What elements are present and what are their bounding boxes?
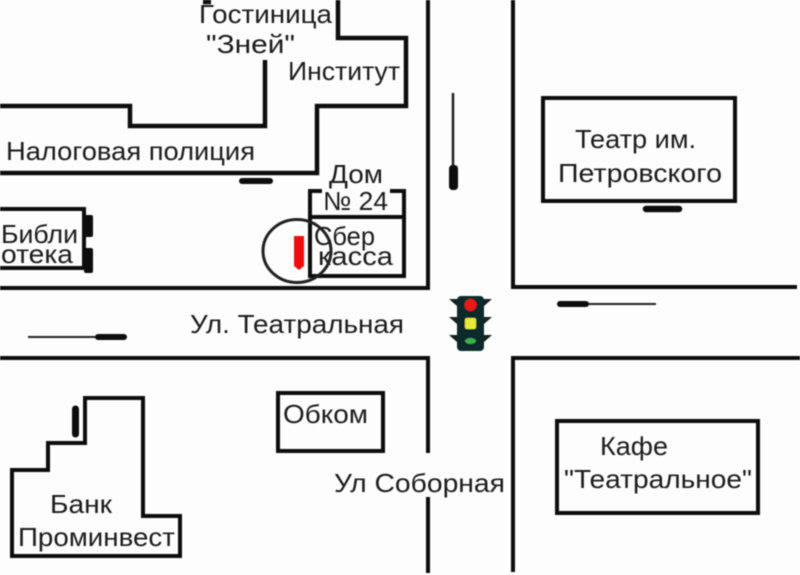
entrance: bank	[72, 409, 79, 434]
label: house number: № 24	[323, 186, 388, 216]
icon: traffic light	[449, 296, 492, 351]
label: house: Дом	[329, 159, 383, 189]
label: hotel name: "Зней"	[206, 29, 295, 59]
label: savings bank line 2: касса	[318, 241, 394, 271]
label: theatre line 1: Театр им.	[575, 124, 696, 154]
label: Sobornaya street: Ул Соборная	[334, 468, 505, 498]
building: cafe	[557, 421, 758, 513]
entrance: theatre	[646, 206, 679, 212]
arrow: left street	[28, 336, 124, 338]
label: bank line 2: Проминвест	[18, 522, 175, 552]
label: cafe line 2: "Театральное"	[564, 464, 752, 494]
label: library line 2: отека	[1, 239, 74, 269]
label: library line 1: Библи	[1, 219, 78, 249]
location marker: red entrance	[294, 236, 304, 270]
building: bank	[12, 398, 180, 556]
label: cafe line 1: Кафе	[600, 431, 668, 461]
building: house 24	[310, 191, 404, 276]
building: theatre	[543, 98, 735, 201]
arrow: one-way vertical	[449, 93, 458, 190]
label: regional committee: Обком	[283, 399, 368, 429]
label: Teatralnaya street: Ул. Театральная	[190, 309, 404, 339]
building: regional committee	[278, 393, 383, 451]
entrance: tax police	[242, 178, 270, 184]
arrow: right street	[560, 303, 656, 305]
label: tax police: Налоговая полиция	[6, 136, 255, 166]
label: theatre line 2: Петровского	[558, 158, 722, 188]
building: library	[0, 209, 84, 268]
location circle	[263, 220, 331, 282]
label: savings bank line 1: Сбер	[314, 221, 375, 251]
label: institute: Институт	[288, 56, 400, 86]
entrances: library	[84, 215, 93, 273]
building: hotel and institute	[0, 0, 406, 173]
label: bank line 1: Банк	[50, 489, 113, 519]
